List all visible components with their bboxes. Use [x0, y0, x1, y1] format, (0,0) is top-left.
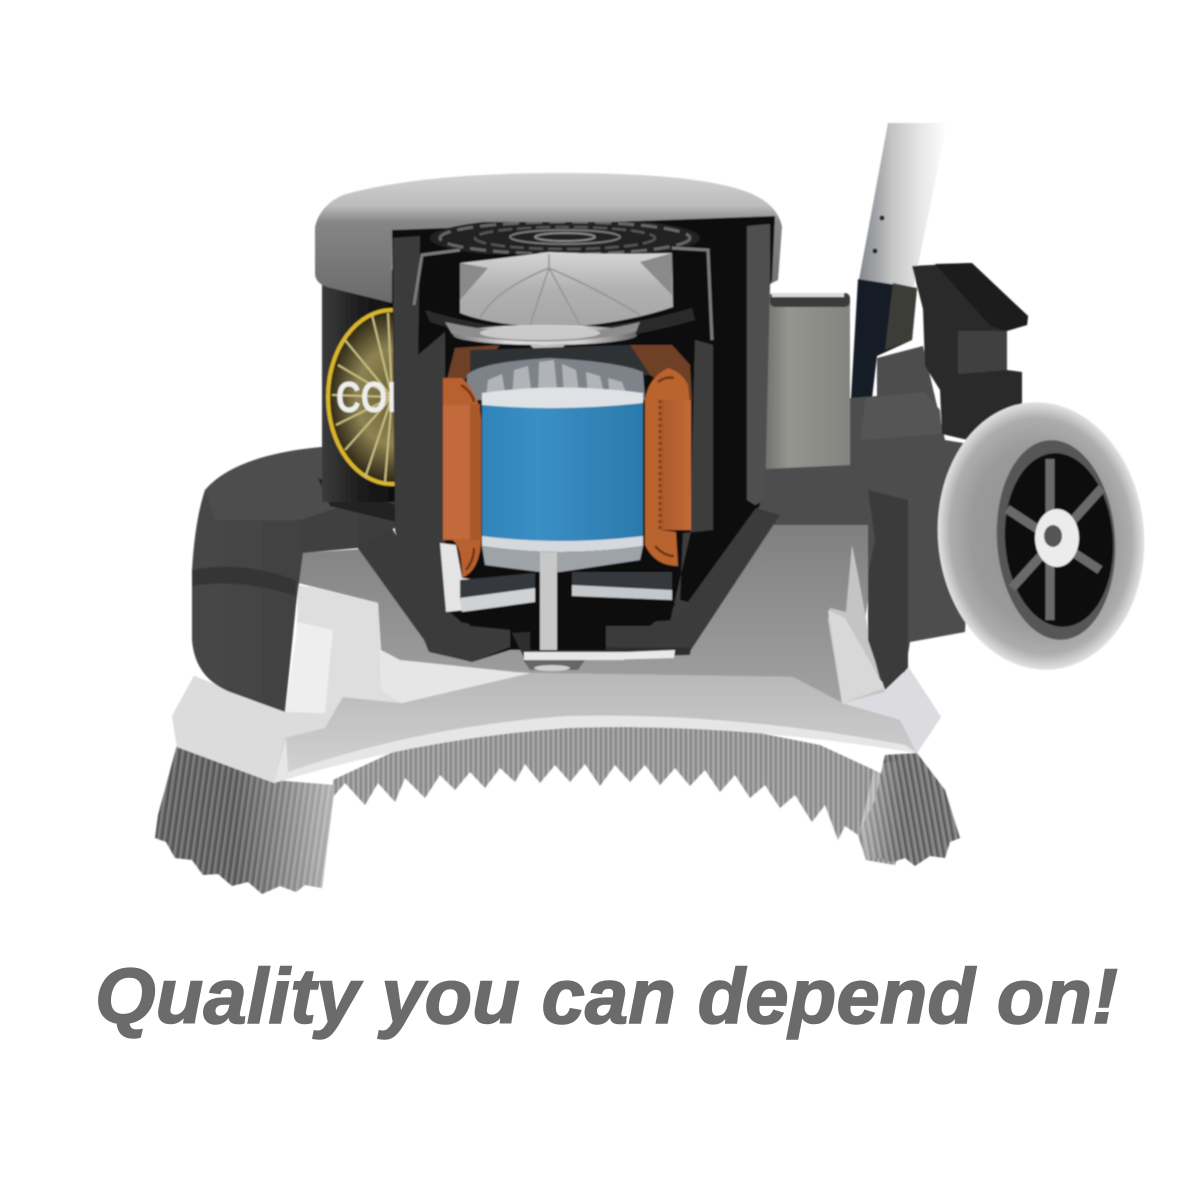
stator back [443, 345, 692, 400]
axle [1044, 525, 1062, 547]
rotor white band bottom [482, 536, 643, 552]
machine illustration [155, 123, 1155, 894]
left front bristles [155, 745, 335, 894]
rotor white band top [482, 388, 643, 412]
back bristles [333, 725, 917, 865]
cooling grill [430, 221, 700, 256]
shaft top [530, 345, 565, 378]
deck white shelf [306, 585, 531, 703]
deck skirt [172, 668, 941, 783]
right funnel [606, 508, 780, 650]
tire [927, 394, 1155, 678]
badge wordmark: COR [336, 373, 412, 422]
right bearing bracket [572, 572, 672, 600]
right copper winding [645, 368, 691, 566]
handle tube [858, 123, 947, 290]
rear wheel [927, 394, 1155, 678]
right white lip [828, 545, 885, 703]
left white lip [285, 585, 402, 716]
motor shaft [540, 552, 557, 650]
rear housing [745, 346, 975, 682]
left funnel [357, 528, 510, 662]
rotor bottom fins [482, 546, 643, 572]
side control box [762, 293, 850, 472]
deck interior [298, 525, 868, 703]
wheel rim [990, 436, 1122, 644]
left housing [192, 447, 400, 712]
wheel hub [1035, 509, 1079, 567]
fan chamber frame [414, 248, 712, 340]
left copper winding [443, 378, 481, 578]
infographic canvas [98, 122, 1145, 1040]
wheel inner [999, 449, 1119, 631]
left shell wall [393, 236, 472, 662]
core badge [324, 306, 396, 488]
right gray strip [747, 224, 770, 505]
handle collar [851, 279, 917, 398]
left bearing bracket [440, 543, 535, 612]
rotor top fins [467, 358, 645, 400]
tagline: Quality you can depend on! [95, 952, 1118, 1040]
cooling fan [460, 252, 673, 328]
rotor blue core [482, 403, 643, 542]
motor top cap [315, 173, 782, 303]
bearing hub [512, 632, 691, 671]
right shell wall [670, 340, 713, 625]
motor can [322, 270, 402, 502]
right front bristles [860, 753, 960, 866]
right inner housing [868, 490, 908, 690]
cutaway shell [392, 216, 775, 662]
lower black cavity [462, 598, 676, 650]
fan plate ring [425, 308, 695, 345]
foot latch [912, 263, 1028, 441]
wheel spokes [1007, 459, 1102, 620]
rear housing top step [860, 392, 942, 440]
